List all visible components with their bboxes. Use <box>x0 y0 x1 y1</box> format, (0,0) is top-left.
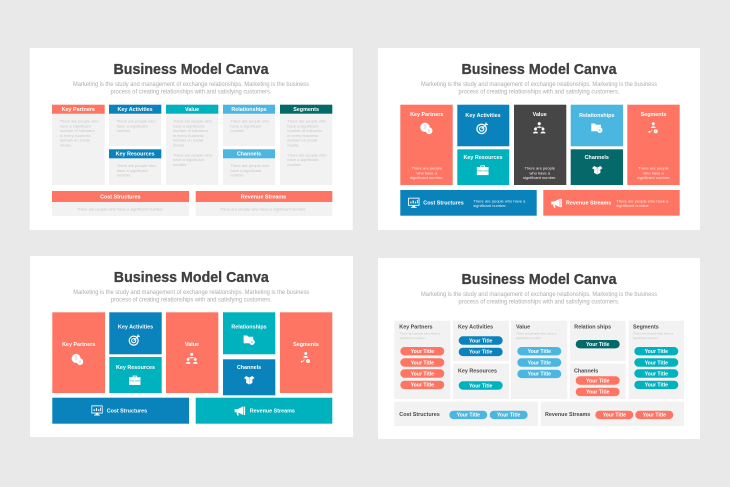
tile: key partners <box>52 312 105 393</box>
cell: segments: Your Title <box>645 349 668 355</box>
cell: value: Your Title <box>528 360 551 366</box>
card: segments: domain on social <box>287 138 317 143</box>
card: segments: Segments <box>293 107 319 113</box>
tile: channels <box>571 149 623 185</box>
card: key resources: Key Resources <box>116 152 155 158</box>
card: value: number. <box>173 162 187 167</box>
tile: segments: There are people <box>638 166 670 171</box>
cell: cost structures: Cost Structures <box>399 412 440 418</box>
cell: segments: There are people who have a <box>633 332 674 336</box>
card: key resources: There are people who <box>117 163 156 168</box>
tile: channels: Channels <box>585 155 609 161</box>
cell: key partners: significant number. <box>400 336 426 340</box>
cell: key activities: Your Title <box>469 350 493 356</box>
card: key activities: Key Activities <box>118 107 153 113</box>
card: value: domain on social <box>173 138 203 143</box>
subtitle <box>421 291 657 306</box>
tile: key resources <box>109 357 162 393</box>
cell: key partners: Your Title <box>411 371 434 377</box>
card: cost structures <box>52 191 189 216</box>
tile: cost structures: significant number. <box>473 203 507 208</box>
card: channels: have a significant <box>230 168 262 173</box>
card: revenue streams: Revenue Streams <box>241 194 286 200</box>
cell: value: There are people who have a <box>516 332 557 336</box>
card: key resources: have a significant <box>117 168 148 173</box>
cell: segments <box>629 321 684 399</box>
card: relationships: Relationships <box>231 107 267 113</box>
tile: relationships: Relationships <box>231 325 267 331</box>
cell: channels: Your Title <box>586 378 610 384</box>
tile: value: There are people <box>524 166 556 171</box>
subtitle: Marketing is the study and management of exchange relationships. Marketing is the business <box>421 81 657 88</box>
cell: key activities: Key Activities <box>458 325 493 331</box>
tile: key activities <box>457 105 509 146</box>
tile: key activities: Key Activities <box>465 113 501 119</box>
card: relationships: have a significant <box>230 123 262 128</box>
tile: value: significant number. <box>523 175 556 180</box>
subtitle: Marketing is the study and management of exchange relationships. Marketing is the business <box>73 81 309 88</box>
card: cost structures: Cost Structures <box>100 194 141 200</box>
title: Business Model Canva <box>462 61 617 78</box>
cell: key partners: Your Title <box>411 349 434 355</box>
card: key partners <box>52 105 105 185</box>
title: Business Model Canva <box>462 271 617 288</box>
panel: solid tiles with icons slide <box>30 256 353 437</box>
cell: cost structures: Your Title <box>497 413 521 419</box>
card: value: There are people who <box>173 118 213 124</box>
card: key partners: domain on social <box>60 138 90 143</box>
cell: key resources: Key Resources <box>458 368 497 374</box>
tile: relationships <box>571 105 623 146</box>
card: revenue streams: There are people who have a significant number. <box>220 207 306 212</box>
cell: value: significant number. <box>516 336 542 340</box>
cell: value <box>511 321 567 399</box>
cell: revenue streams: Your Title <box>603 413 626 419</box>
card: relationships <box>223 105 275 146</box>
cell: cost structures: Your Title <box>457 413 480 419</box>
tile: cost structures <box>52 398 189 424</box>
card: key resources: number. <box>117 173 131 178</box>
tile: segments: who have a <box>643 170 664 175</box>
cell: key activities: Your Title <box>469 338 493 344</box>
tile: revenue streams: significant number. <box>616 203 650 208</box>
card: value: Value <box>185 107 199 113</box>
tile: key partners: Key Partners <box>410 112 443 118</box>
tile: segments: Segments <box>293 342 319 348</box>
tile: segments: significant number. <box>637 175 670 180</box>
card: cost structures: There are people who have a significant number. <box>77 207 164 212</box>
cell: key partners: Your Title <box>411 360 434 366</box>
tile: revenue streams: Revenue Streams <box>250 408 295 414</box>
card: key partners: media. <box>60 142 72 148</box>
card: segments: have a significant <box>287 123 319 128</box>
card: value: There are people who <box>173 152 213 157</box>
title: Business Model Canva <box>114 61 269 78</box>
card: key partners: number of followers <box>60 128 95 133</box>
cell: relationships <box>570 321 626 361</box>
panel: solid tiles with icons and text slide <box>378 48 700 230</box>
cell: revenue streams <box>541 402 684 426</box>
cell: value: Your Title <box>528 372 551 378</box>
card: key partners: There are people who <box>60 118 99 124</box>
card: segments: have a significant <box>287 157 319 162</box>
card: segments: There are people who <box>287 152 327 157</box>
card: key partners: Key Partners <box>62 107 95 113</box>
card: revenue streams <box>196 191 332 216</box>
tile: revenue streams <box>543 190 680 216</box>
tile: value: who have a <box>529 170 551 175</box>
card: segments: number. <box>287 162 302 167</box>
subtitle <box>73 289 309 304</box>
tile: key partners: Key Partners <box>62 342 95 348</box>
card: value: media. <box>173 142 185 148</box>
tile: cost structures: There are people who have a <box>473 198 526 203</box>
subtitle: Marketing is the study and management of exchange relationships. Marketing is the business <box>421 291 657 298</box>
subtitle <box>73 81 309 96</box>
tile: cost structures <box>400 190 537 216</box>
card: relationships: There are people who <box>230 118 270 124</box>
cell: channels: Your Title <box>586 390 610 396</box>
tile: revenue streams <box>196 398 332 424</box>
cell: key partners: There are people who have a <box>400 332 440 336</box>
card: channels: There are people who <box>230 163 270 168</box>
cell: relationships: Your Title <box>586 342 610 348</box>
card: value: in every business <box>173 133 204 138</box>
subtitle <box>421 81 657 96</box>
tile: key resources: Key Resources <box>464 155 502 161</box>
cell: key partners: Key Partners <box>399 325 433 331</box>
tile: value <box>166 312 218 393</box>
panel: pill list slide <box>378 258 700 439</box>
card: segments <box>280 105 332 185</box>
card: value: number of followers <box>173 128 208 133</box>
card: segments: media. <box>287 142 299 148</box>
tile: relationships <box>223 312 275 354</box>
tile: key resources <box>457 149 509 185</box>
cell: revenue streams: Your Title <box>643 413 666 419</box>
cell: value: Value <box>516 325 530 331</box>
subtitle: process of creating relationships with and satisfying customers. <box>111 297 272 304</box>
card: value: have a significant <box>173 157 205 162</box>
card: key activities: number. <box>117 128 131 133</box>
cell: channels <box>570 364 626 399</box>
subtitle: process of creating relationships with and satisfying customers. <box>458 89 620 96</box>
cell: segments: Your Title <box>645 383 668 389</box>
card: channels: number. <box>230 173 245 178</box>
tile: relationships: Relationships <box>579 113 614 119</box>
cell: key resources <box>453 364 509 399</box>
cell: relationships: Relation ships <box>574 325 611 331</box>
cell: segments: Segments <box>633 325 659 331</box>
card: value: have a significant <box>173 123 205 128</box>
tile: key resources: Key Resources <box>116 365 155 371</box>
card: key activities <box>109 105 161 146</box>
tile: key activities <box>109 312 162 354</box>
cell: cost structures <box>394 402 538 426</box>
card: channels: Channels <box>237 152 261 158</box>
tile: key activities: Key Activities <box>118 325 153 331</box>
card: key activities: have a significant <box>117 123 148 128</box>
panel: labeled header cards slide <box>30 48 353 230</box>
cell: segments: Your Title <box>645 371 668 377</box>
tile: key partners: who have a <box>416 170 438 175</box>
tile: cost structures: Cost Structures <box>107 408 147 414</box>
card: relationships: number. <box>230 128 245 133</box>
card: key partners: in every business <box>60 133 91 138</box>
tile: channels: Channels <box>237 365 261 371</box>
card: channels <box>223 149 275 185</box>
cell: key partners: Your Title <box>411 383 434 389</box>
tile: segments: Segments <box>641 112 666 118</box>
card: key resources <box>109 149 161 185</box>
cell: channels: Channels <box>574 368 598 374</box>
tile: value: Value <box>533 112 547 118</box>
title: Business Model Canva <box>114 269 269 286</box>
tile: segments <box>280 312 332 393</box>
tile: value <box>514 105 566 185</box>
tile: segments <box>627 105 680 185</box>
tile: key partners: There are people <box>411 166 443 171</box>
tile: revenue streams: There are people who have a <box>616 198 669 203</box>
cell: key partners <box>394 321 450 399</box>
subtitle: process of creating relationships with and satisfying customers. <box>458 299 620 306</box>
cell: revenue streams: Revenue Streams <box>545 412 590 418</box>
card: key activities: There are people who <box>117 118 156 124</box>
subtitle: Marketing is the study and management of exchange relationships. Marketing is the business <box>73 289 309 296</box>
card: segments: There are people who <box>287 118 327 124</box>
cell: key resources: Your Title <box>469 383 493 389</box>
card: segments: in every business <box>287 133 318 138</box>
cell: segments: Your Title <box>645 360 668 366</box>
tile: key partners <box>400 105 453 185</box>
tile: key partners: significant number. <box>410 175 443 180</box>
card: key partners: have a significant <box>60 123 91 128</box>
tile: revenue streams: Revenue Streams <box>566 201 611 207</box>
tile: cost structures: Cost Structures <box>423 201 464 207</box>
cell: value: Your Title <box>528 349 551 355</box>
tile: value: Value <box>185 342 199 348</box>
cell: segments: significant number. <box>633 336 659 340</box>
subtitle: process of creating relationships with and satisfying customers. <box>110 89 272 96</box>
card: value <box>166 105 218 185</box>
card: segments: number of followers <box>287 128 322 133</box>
tile: channels <box>223 359 275 395</box>
cell: key activities <box>453 321 509 361</box>
